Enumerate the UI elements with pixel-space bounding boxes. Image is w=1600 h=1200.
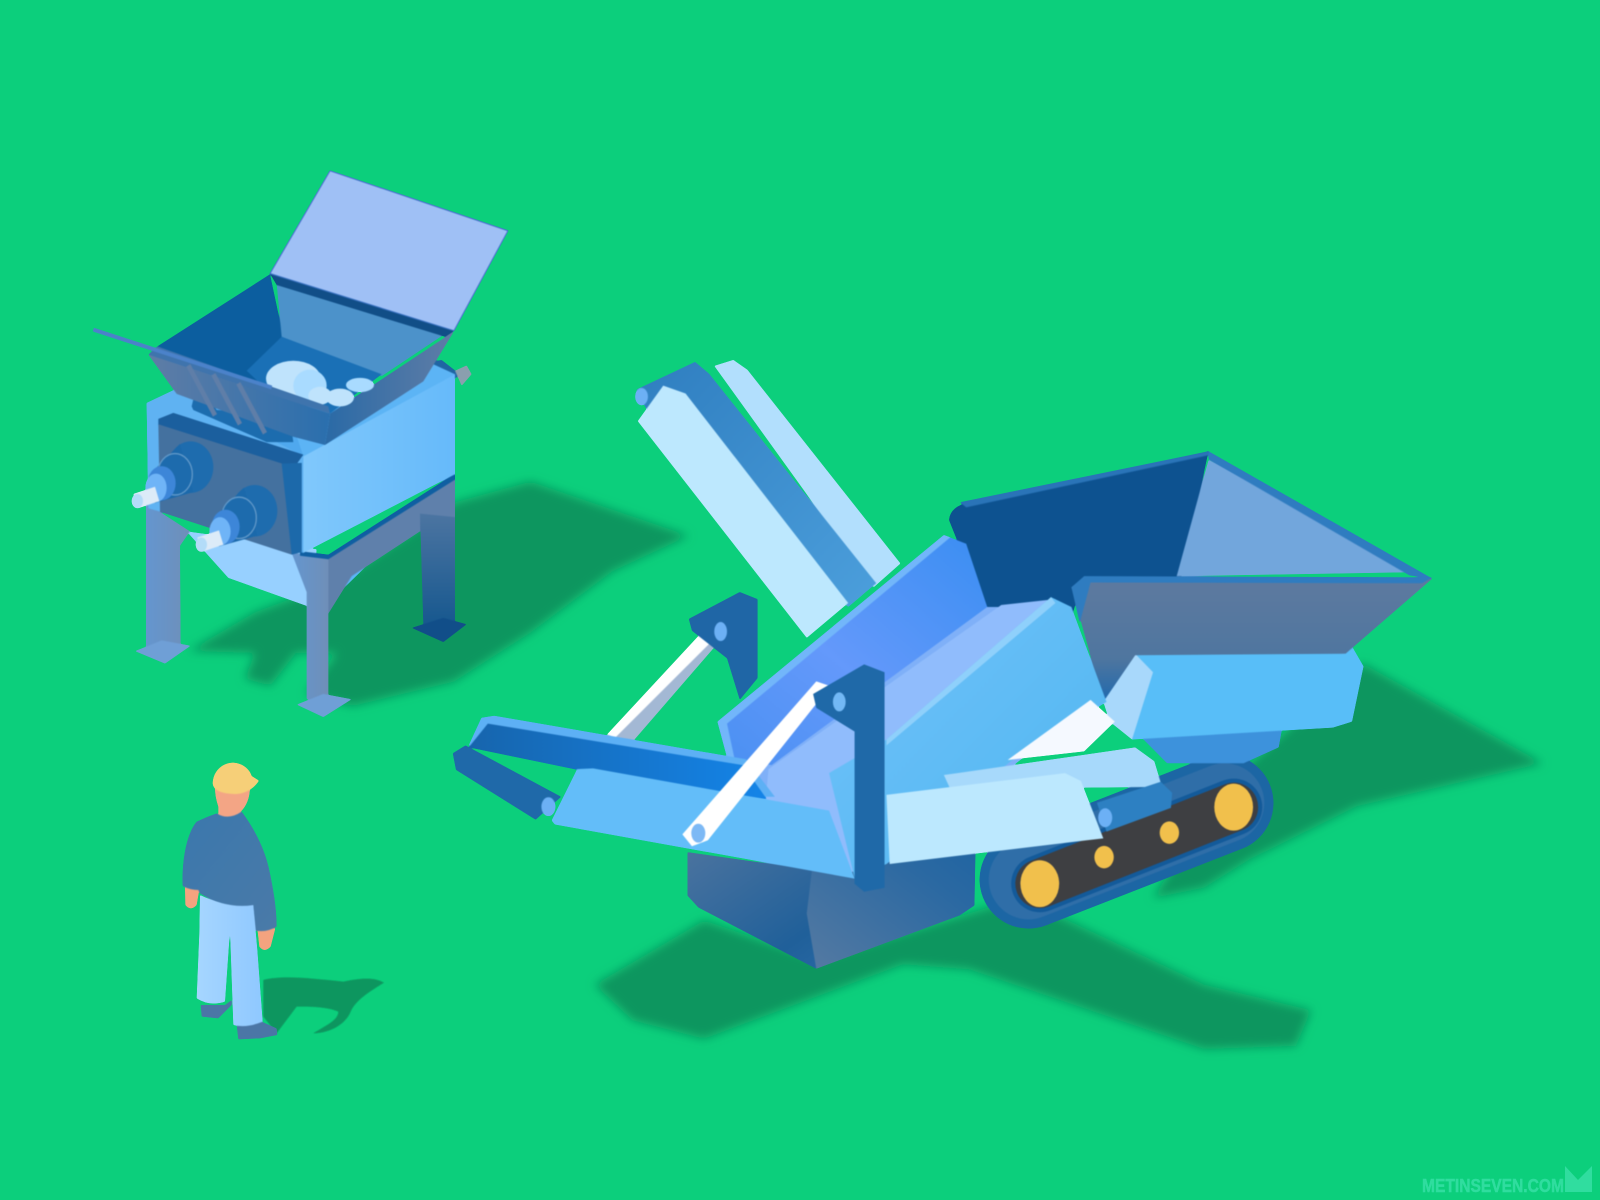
hopper front lip <box>148 346 330 414</box>
shoes <box>201 1000 277 1039</box>
neck and head <box>215 788 250 818</box>
front hopper face <box>1071 576 1432 702</box>
right light panels <box>886 747 1172 864</box>
hopper lid <box>270 171 508 331</box>
body left face <box>147 389 303 551</box>
ground shadows <box>189 482 1543 1049</box>
right hand <box>257 928 275 950</box>
lower hopper <box>187 531 402 607</box>
shredder machine <box>93 171 508 717</box>
guide bar with struts <box>93 330 272 433</box>
motor 2 <box>196 485 277 552</box>
right side box <box>1103 647 1364 763</box>
watermark logo <box>1565 1166 1592 1192</box>
hard hat <box>213 763 259 794</box>
body top band <box>293 364 455 456</box>
watermark <box>1422 1166 1592 1196</box>
shadow: crusher right <box>1153 663 1543 898</box>
body backing <box>727 556 1100 864</box>
white block <box>1008 700 1115 760</box>
track wheels <box>1020 784 1253 907</box>
trousers <box>197 895 263 1026</box>
rear support arm <box>607 592 758 739</box>
left discharge conveyor <box>453 716 855 879</box>
hopper outer faces <box>148 331 454 445</box>
toothed plate <box>192 392 293 442</box>
cyan body panel <box>829 597 1107 878</box>
periwinkle body <box>765 599 1068 876</box>
rocks in hopper <box>266 361 374 406</box>
sweater <box>183 812 277 931</box>
front support arm <box>682 664 885 892</box>
body right face <box>303 374 455 553</box>
blue sloped panel <box>717 535 987 765</box>
watermark: METINSEVEN.COM <box>1422 1176 1564 1196</box>
mobile crusher <box>453 360 1432 969</box>
base block <box>687 836 976 969</box>
right-side shaft <box>430 360 472 386</box>
back right leg <box>412 474 467 642</box>
body backing <box>147 374 455 553</box>
shadow: crusher lower <box>595 898 1311 1049</box>
worker <box>183 763 277 1039</box>
shadow: shredder machine <box>189 482 689 706</box>
crawler track <box>1020 784 1253 907</box>
hopper interior <box>157 274 454 414</box>
long rear conveyor <box>635 360 900 638</box>
control panel <box>158 413 303 555</box>
front leg and beam <box>292 474 455 717</box>
worker shadow <box>263 977 384 1033</box>
left hand <box>185 887 199 908</box>
left leg <box>135 503 191 664</box>
rear hopper <box>949 451 1432 619</box>
motor 1 <box>132 441 213 508</box>
